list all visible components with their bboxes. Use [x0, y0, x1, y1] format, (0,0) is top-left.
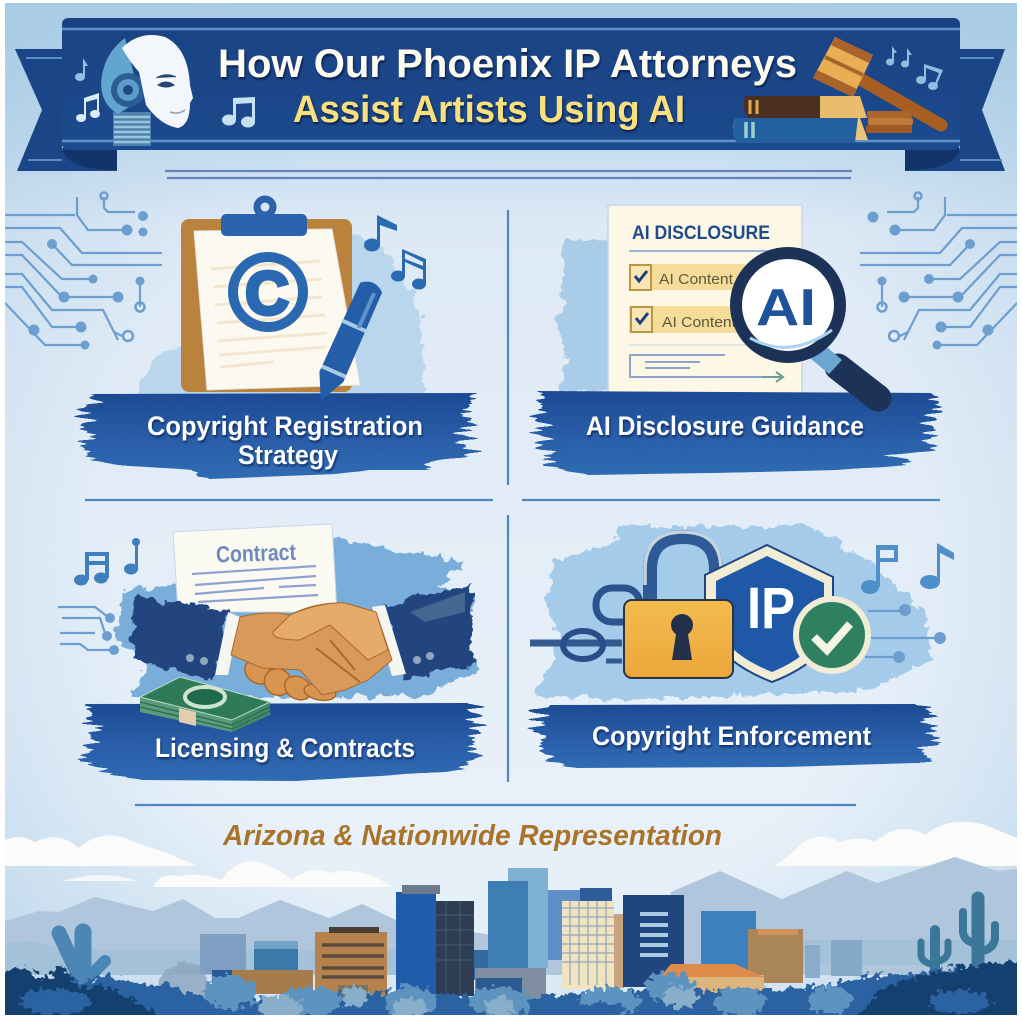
panel dividers [85, 210, 940, 805]
foliage foreground [0, 958, 1022, 1024]
hands [231, 603, 392, 695]
icon: shackle [650, 537, 716, 605]
icon: music notes [74, 538, 140, 586]
tan tower [748, 929, 803, 983]
icon: shield: IP [747, 576, 795, 641]
icon: copyright symbol [233, 257, 303, 327]
label: licensing and contracts: Licensing & Contracts [155, 733, 415, 763]
watercolor wash [535, 525, 930, 700]
label brush stroke [86, 703, 476, 781]
icon: gavel and books [733, 37, 941, 142]
contract document: Contract [216, 539, 297, 567]
low brown block [212, 970, 313, 994]
icon: robot head [101, 35, 193, 146]
label brush stroke [84, 393, 472, 479]
icon: cash stack [140, 677, 270, 732]
label: copyright registration strategy: Strategy [238, 440, 338, 470]
circuit dots [865, 604, 946, 663]
suit sleeves [132, 585, 474, 680]
document: AI DISCLOSURE [632, 223, 770, 244]
label: copyright registration strategy: Copyright Registration [147, 411, 423, 441]
watercolor wash [137, 232, 424, 398]
icon: music notes [861, 543, 954, 594]
shirt cuffs [215, 612, 240, 675]
circuit left [5, 192, 162, 350]
heading line 1: How Our Phoenix IP Attorneys [218, 42, 797, 86]
panel: ai disclosure guidance [538, 205, 936, 475]
icon: check badge [793, 596, 871, 674]
ribbon fold shadows [62, 148, 960, 170]
divider lines under banner [165, 171, 852, 178]
heading line 2: Assist Artists Using AI [293, 89, 685, 131]
fingers [240, 655, 337, 705]
tall blue tower [396, 885, 474, 998]
panel: copyright registration strategy [84, 199, 472, 479]
label brush stroke [538, 391, 936, 475]
label: copyright registration strategy [147, 411, 423, 470]
label: ai disclosure guidance: AI Disclosure Guidance [586, 411, 864, 441]
icon: shield [705, 545, 833, 682]
icon: music notes [364, 215, 426, 290]
icon: pen [309, 278, 385, 406]
icon: left cactus [59, 932, 105, 985]
watercolor wash [115, 538, 480, 697]
circuit right [860, 192, 1017, 350]
orange roof building [660, 964, 764, 997]
panel: licensing and contracts [58, 524, 480, 781]
cream tower [562, 901, 624, 989]
icon: handshake [132, 585, 474, 705]
clouds [5, 822, 1017, 887]
panel: copyright enforcement [530, 525, 954, 768]
document [608, 205, 802, 395]
icon: chain [530, 588, 640, 661]
ribbon right tail [905, 49, 1005, 171]
background buildings [200, 934, 246, 974]
title banner [15, 18, 1005, 171]
navy tower [623, 895, 684, 987]
footer: representation heading: Arizona & Nationwide Representation [222, 820, 722, 852]
icon: magnifying glass: AI [756, 279, 816, 337]
icon: padlock [624, 600, 733, 678]
brown office [315, 927, 387, 997]
label brush stroke [538, 704, 932, 768]
checklist rows: AI Content [659, 271, 734, 288]
checklist rows: AI Content [662, 314, 737, 331]
low glass building [475, 968, 546, 998]
circuit traces [58, 607, 119, 655]
ribbon main panel [62, 18, 960, 150]
checklist rows [629, 264, 745, 333]
contract document [173, 524, 337, 612]
icon: music notes left [75, 58, 255, 128]
icon: clipboard [181, 199, 385, 406]
blue office [701, 911, 756, 971]
icon: magnifying glass [736, 253, 878, 398]
label: copyright enforcement: Copyright Enforcement [592, 721, 871, 751]
icon: right cacti [921, 898, 995, 975]
mountains [5, 857, 1017, 975]
icon: copyright symbol: C [245, 260, 289, 327]
icon: music notes right [886, 46, 943, 90]
ribbon left tail [15, 49, 117, 171]
watercolor wash [556, 238, 612, 392]
city skyline [200, 868, 862, 998]
